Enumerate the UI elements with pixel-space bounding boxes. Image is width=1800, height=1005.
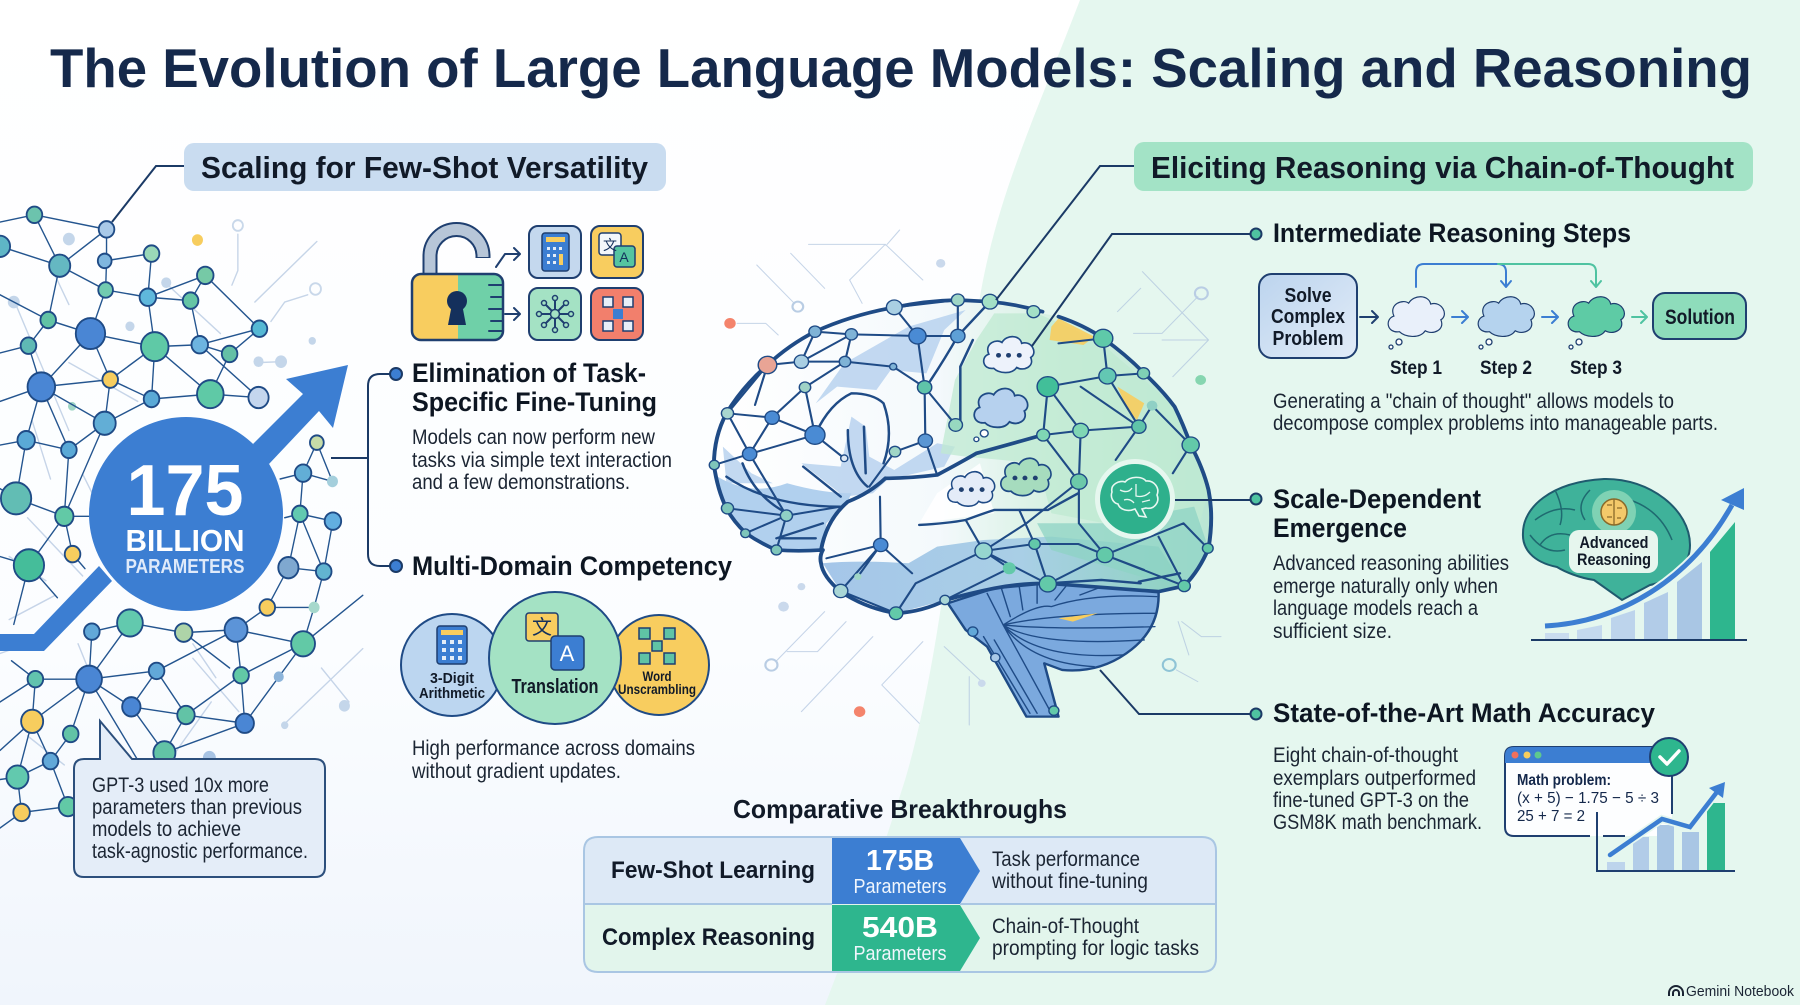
icon: open lock with task tiles: A (619, 249, 629, 265)
section: scale-dependent emergence: emerge naturally only when (1273, 575, 1498, 598)
connector bracket (331, 374, 396, 566)
math window and chart: 25 + 7 = 2 (1517, 808, 1585, 825)
section: state-of-the-art math accuracy: Eight chain-of-thought (1273, 744, 1458, 767)
row: few-shot learning: Parameters (854, 876, 946, 898)
row: complex reasoning: 540B (862, 912, 938, 944)
heading pill: right (996, 142, 1753, 300)
row: few-shot learning: 175B (866, 845, 934, 877)
row: complex reasoning (585, 904, 1215, 971)
brain stem and cerebellum (948, 583, 1159, 717)
section: intermediate reasoning steps: decompose complex problems into manageable parts. (1273, 412, 1718, 435)
leader lines (1032, 234, 1250, 714)
section: state-of-the-art math accuracy: exemplars outperformed (1273, 767, 1476, 790)
brain badge icon (1095, 459, 1175, 539)
section: intermediate reasoning steps (1250, 218, 1746, 435)
parameter count circle: PARAMETERS (126, 556, 244, 578)
flow diagram: Solution (1665, 306, 1735, 329)
parameter count circle: BILLION (126, 523, 244, 558)
neural network cluster (0, 207, 363, 828)
heading pill: left: Scaling for Few-Shot Versatility (201, 150, 649, 185)
row: few-shot learning: Few-Shot Learning (611, 857, 815, 884)
text block: multi-domain competency: without gradient updates. (411, 760, 621, 783)
table heading: Comparative Breakthroughs (733, 794, 1067, 824)
callout: GPT-3: parameters than previous (92, 796, 302, 819)
brain illustration (709, 230, 1221, 725)
flow diagram: Complex (1271, 306, 1345, 328)
brain growth chart: Advanced (1580, 533, 1648, 552)
text block: multi-domain competency (390, 551, 732, 783)
network links (0, 215, 259, 624)
text block: elimination of fine-tuning: Elimination of Task- (412, 358, 646, 388)
row: complex reasoning: prompting for logic tasks (992, 937, 1199, 960)
brain growth chart (1523, 479, 1747, 640)
text block: multi-domain competency: Multi-Domain Competency (412, 551, 732, 581)
domain circles: 文 (532, 616, 552, 639)
brain outline (714, 300, 1211, 613)
section: state-of-the-art math accuracy: State-of-the-Art Math Accuracy (1273, 698, 1655, 728)
title: The Evolution of Large Language Models: Scaling and Reasoning (50, 37, 1752, 99)
section: intermediate reasoning steps: Generating a "chain of thought" allows models to (1273, 390, 1674, 413)
icon: open lock with task tiles (412, 226, 643, 340)
brain nodes (709, 294, 1213, 715)
flow diagram: Step 1 (1390, 358, 1442, 379)
network nodes (0, 207, 341, 821)
icon: open lock with task tiles: 文 (603, 237, 617, 253)
text block: elimination of fine-tuning: tasks via simple text interaction (412, 449, 672, 472)
row: few-shot learning (585, 838, 1215, 904)
callout: GPT-3: GPT-3 used 10x more (92, 774, 269, 797)
text block: elimination of fine-tuning: and a few demonstrations. (412, 471, 630, 494)
callout: GPT-3 (74, 721, 325, 877)
section: scale-dependent emergence: Emergence (1273, 513, 1407, 543)
domain circles: Unscrambling (618, 681, 696, 697)
domain circles: Arithmetic (419, 685, 485, 702)
section: scale-dependent emergence (1250, 479, 1747, 643)
section: scale-dependent emergence: Scale-Dependent (1273, 484, 1481, 514)
parameter count circle: 175 (126, 451, 244, 531)
flow diagram: Problem (1272, 328, 1344, 350)
row: few-shot learning: Task performance (992, 848, 1140, 871)
flow diagram (1259, 264, 1746, 379)
section: intermediate reasoning steps: Intermediate Reasoning Steps (1273, 218, 1631, 248)
heading pill: left (112, 143, 666, 222)
domain circles: Translation (512, 676, 598, 698)
panel: scaling for few-shot versatility (0, 143, 732, 877)
growth arrow (0, 365, 348, 651)
watermark: Gemini Notebook: Gemini Notebook (1686, 984, 1795, 1000)
row: complex reasoning: Chain-of-Thought (992, 915, 1139, 938)
flow diagram: Step 2 (1480, 358, 1532, 379)
text block: elimination of fine-tuning: Specific Fine-Tuning (412, 387, 657, 417)
flow diagram: Solve (1284, 285, 1332, 307)
brain network links (714, 300, 1208, 613)
text block: multi-domain competency: High performance across domains (412, 737, 695, 760)
section: state-of-the-art math accuracy (1250, 698, 1735, 871)
comparison table (584, 794, 1216, 972)
section: state-of-the-art math accuracy: fine-tuned GPT-3 on the (1273, 789, 1469, 812)
math window and chart: Math problem: (1517, 772, 1611, 789)
domain circles: Word (642, 668, 672, 684)
callout: GPT-3: task-agnostic performance. (92, 840, 308, 863)
section: scale-dependent emergence: Advanced reasoning abilities (1273, 552, 1509, 575)
speech bubbles (948, 337, 1051, 506)
section: state-of-the-art math accuracy: GSM8K math benchmark. (1273, 811, 1482, 834)
sulci (821, 435, 1042, 550)
domain circles (401, 592, 709, 724)
row: few-shot learning: without fine-tuning (991, 870, 1148, 893)
math window and chart (1505, 738, 1735, 871)
callout: GPT-3: models to achieve (92, 818, 241, 841)
cerebrum (714, 300, 1211, 613)
row: complex reasoning: Complex Reasoning (602, 924, 815, 951)
flow diagram: Step 3 (1570, 358, 1622, 379)
section: scale-dependent emergence: sufficient size. (1273, 620, 1392, 643)
text block: elimination of fine-tuning: Models can now perform new (412, 426, 656, 449)
text block: elimination of fine-tuning (390, 358, 672, 494)
section: scale-dependent emergence: language models reach a (1273, 597, 1478, 620)
panel: eliciting reasoning via chain-of-thought (996, 142, 1753, 871)
heading pill: right: Eliciting Reasoning via Chain-of-Thought (1151, 150, 1734, 185)
parameter count circle (89, 417, 283, 611)
background circuit lines (737, 230, 1221, 725)
math window and chart: (x + 5) − 1.75 − 5 ÷ 3 (1517, 790, 1659, 807)
brain growth chart: Reasoning (1577, 550, 1651, 569)
domain circles: 3-Digit (430, 670, 474, 687)
domain circles: A (560, 641, 575, 666)
row: complex reasoning: Parameters (854, 943, 946, 965)
